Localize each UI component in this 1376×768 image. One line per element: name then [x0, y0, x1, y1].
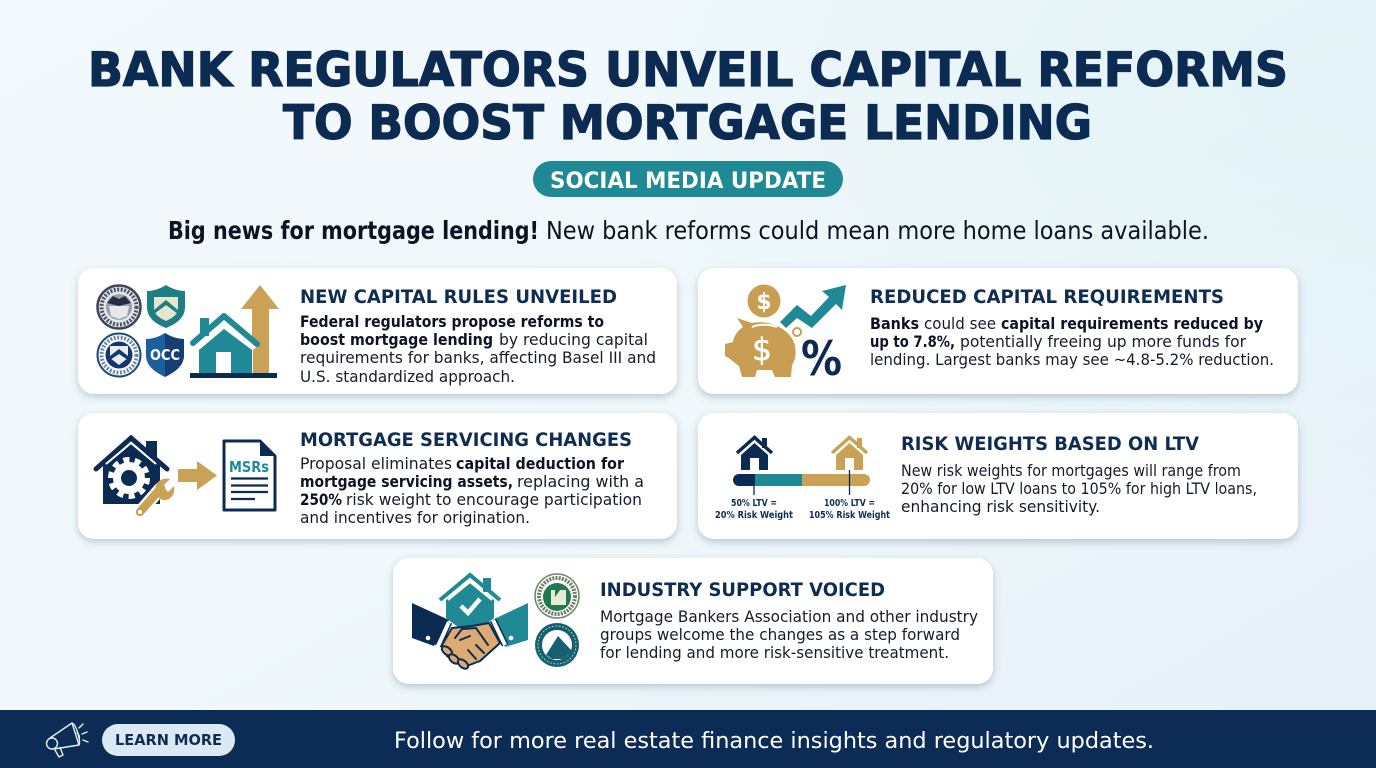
title: BANK REGULATORS UNVEIL CAPITAL REFORMS [88, 43, 1288, 98]
panel: risk weights based on LTV [698, 413, 1298, 539]
body text: capital deduction for [456, 454, 624, 473]
body text: requirements for banks, affecting Basel III and [300, 348, 656, 367]
body text: 250% [300, 490, 342, 509]
body text [870, 314, 1274, 369]
icon: MSRs document: MSRs [229, 458, 269, 476]
icon: teal association seal [535, 623, 579, 667]
arrow: gold [178, 461, 217, 490]
body text: mortgage servicing assets, [300, 472, 513, 491]
badge: social media update: SOCIAL MEDIA UPDATE [550, 168, 826, 194]
icon: piggy bank with coin: $ [752, 332, 772, 368]
body text: for lending and more risk-sensitive treatment. [600, 643, 949, 662]
icon: house with gear and wrench [96, 438, 174, 514]
label: 50% LTV: 50% LTV = [731, 498, 777, 509]
icon: piggy bank with coin: $ [756, 290, 772, 315]
body text: could see [924, 314, 996, 333]
subtitle [168, 216, 1209, 245]
subtitle: Big news for mortgage lending! [168, 216, 539, 245]
body text: replacing with a [517, 472, 644, 491]
icon: teal shield [147, 285, 185, 328]
subtitle: New bank reforms could mean more home loans available. [546, 216, 1209, 245]
heading: RISK WEIGHTS BASED ON LTV [901, 433, 1199, 455]
panel: industry support [393, 558, 993, 684]
body text [300, 454, 644, 527]
title [88, 43, 1288, 151]
icon: MSRs document [224, 441, 275, 510]
body text: risk weight to encourage participation [346, 490, 642, 509]
body text: Mortgage Bankers Association and other industry [600, 607, 978, 626]
body text: up to 7.8%, [870, 332, 955, 351]
icon: handshake [412, 603, 528, 671]
footer text: Follow for more real estate finance insights and regulatory updates. [394, 729, 1154, 754]
title: TO BOOST MORTGAGE LENDING [283, 96, 1092, 151]
body text: Proposal eliminates [300, 454, 452, 473]
icon: percent: % [801, 332, 842, 387]
body text [901, 461, 1257, 516]
icon: OCC shield: OCC [150, 346, 180, 364]
icon: green association seal [535, 574, 579, 618]
panel: reduced capital requirements [698, 268, 1298, 394]
body text: 20% for low LTV loans to 105% for high LTV loans, [901, 479, 1257, 498]
panel: new capital rules [78, 268, 677, 394]
body text: Banks [870, 314, 919, 333]
heading: MORTGAGE SERVICING CHANGES [300, 429, 632, 451]
body text: potentially freeing up more funds for [960, 332, 1246, 351]
icon: federal reserve seal [98, 286, 140, 328]
label: 100% LTV: 100% LTV = [824, 498, 875, 509]
body text: groups welcome the changes as a step forward [600, 625, 960, 644]
label: 100% LTV [809, 498, 890, 521]
label: 100% LTV: 105% Risk Weight [809, 510, 890, 521]
body text: Federal regulators propose reforms to [300, 312, 604, 331]
button: learn more: LEARN MORE [115, 731, 222, 749]
label: 50% LTV: 20% Risk Weight [715, 510, 793, 521]
badge: social media update [533, 161, 843, 197]
chart: LTV scale bar [733, 470, 870, 495]
heading: INDUSTRY SUPPORT VOICED [600, 579, 885, 601]
body text: capital requirements reduced by [1001, 314, 1264, 333]
body text: by reducing capital [499, 330, 648, 349]
icon: house with check [440, 575, 500, 630]
icon: megaphone [46, 723, 88, 757]
heading: NEW CAPITAL RULES UNVEILED [300, 286, 617, 308]
icon: teal growth arrow [780, 285, 846, 328]
icon: piggy bank with coin [725, 284, 801, 377]
body text [300, 312, 656, 386]
icon: gold house [832, 438, 867, 470]
body text: and incentives for origination. [300, 508, 530, 527]
body text: boost mortgage lending [300, 330, 493, 349]
label: 50% LTV [715, 498, 793, 521]
body text: enhancing risk sensitivity. [901, 497, 1100, 516]
body text: lending. Largest banks may see ~4.8-5.2% reduction. [870, 350, 1274, 369]
icon: navy house [737, 438, 772, 470]
icon: treasury seal [98, 334, 140, 376]
icon: house with growth arrow [190, 285, 279, 378]
body text [600, 607, 978, 662]
footer bar [0, 710, 1376, 768]
button: learn more [102, 724, 235, 756]
panel: mortgage servicing changes [78, 413, 677, 539]
body text: U.S. standardized approach. [300, 367, 515, 386]
heading: REDUCED CAPITAL REQUIREMENTS [870, 286, 1224, 308]
icon: OCC shield [146, 333, 184, 377]
body text: New risk weights for mortgages will range from [901, 461, 1241, 480]
